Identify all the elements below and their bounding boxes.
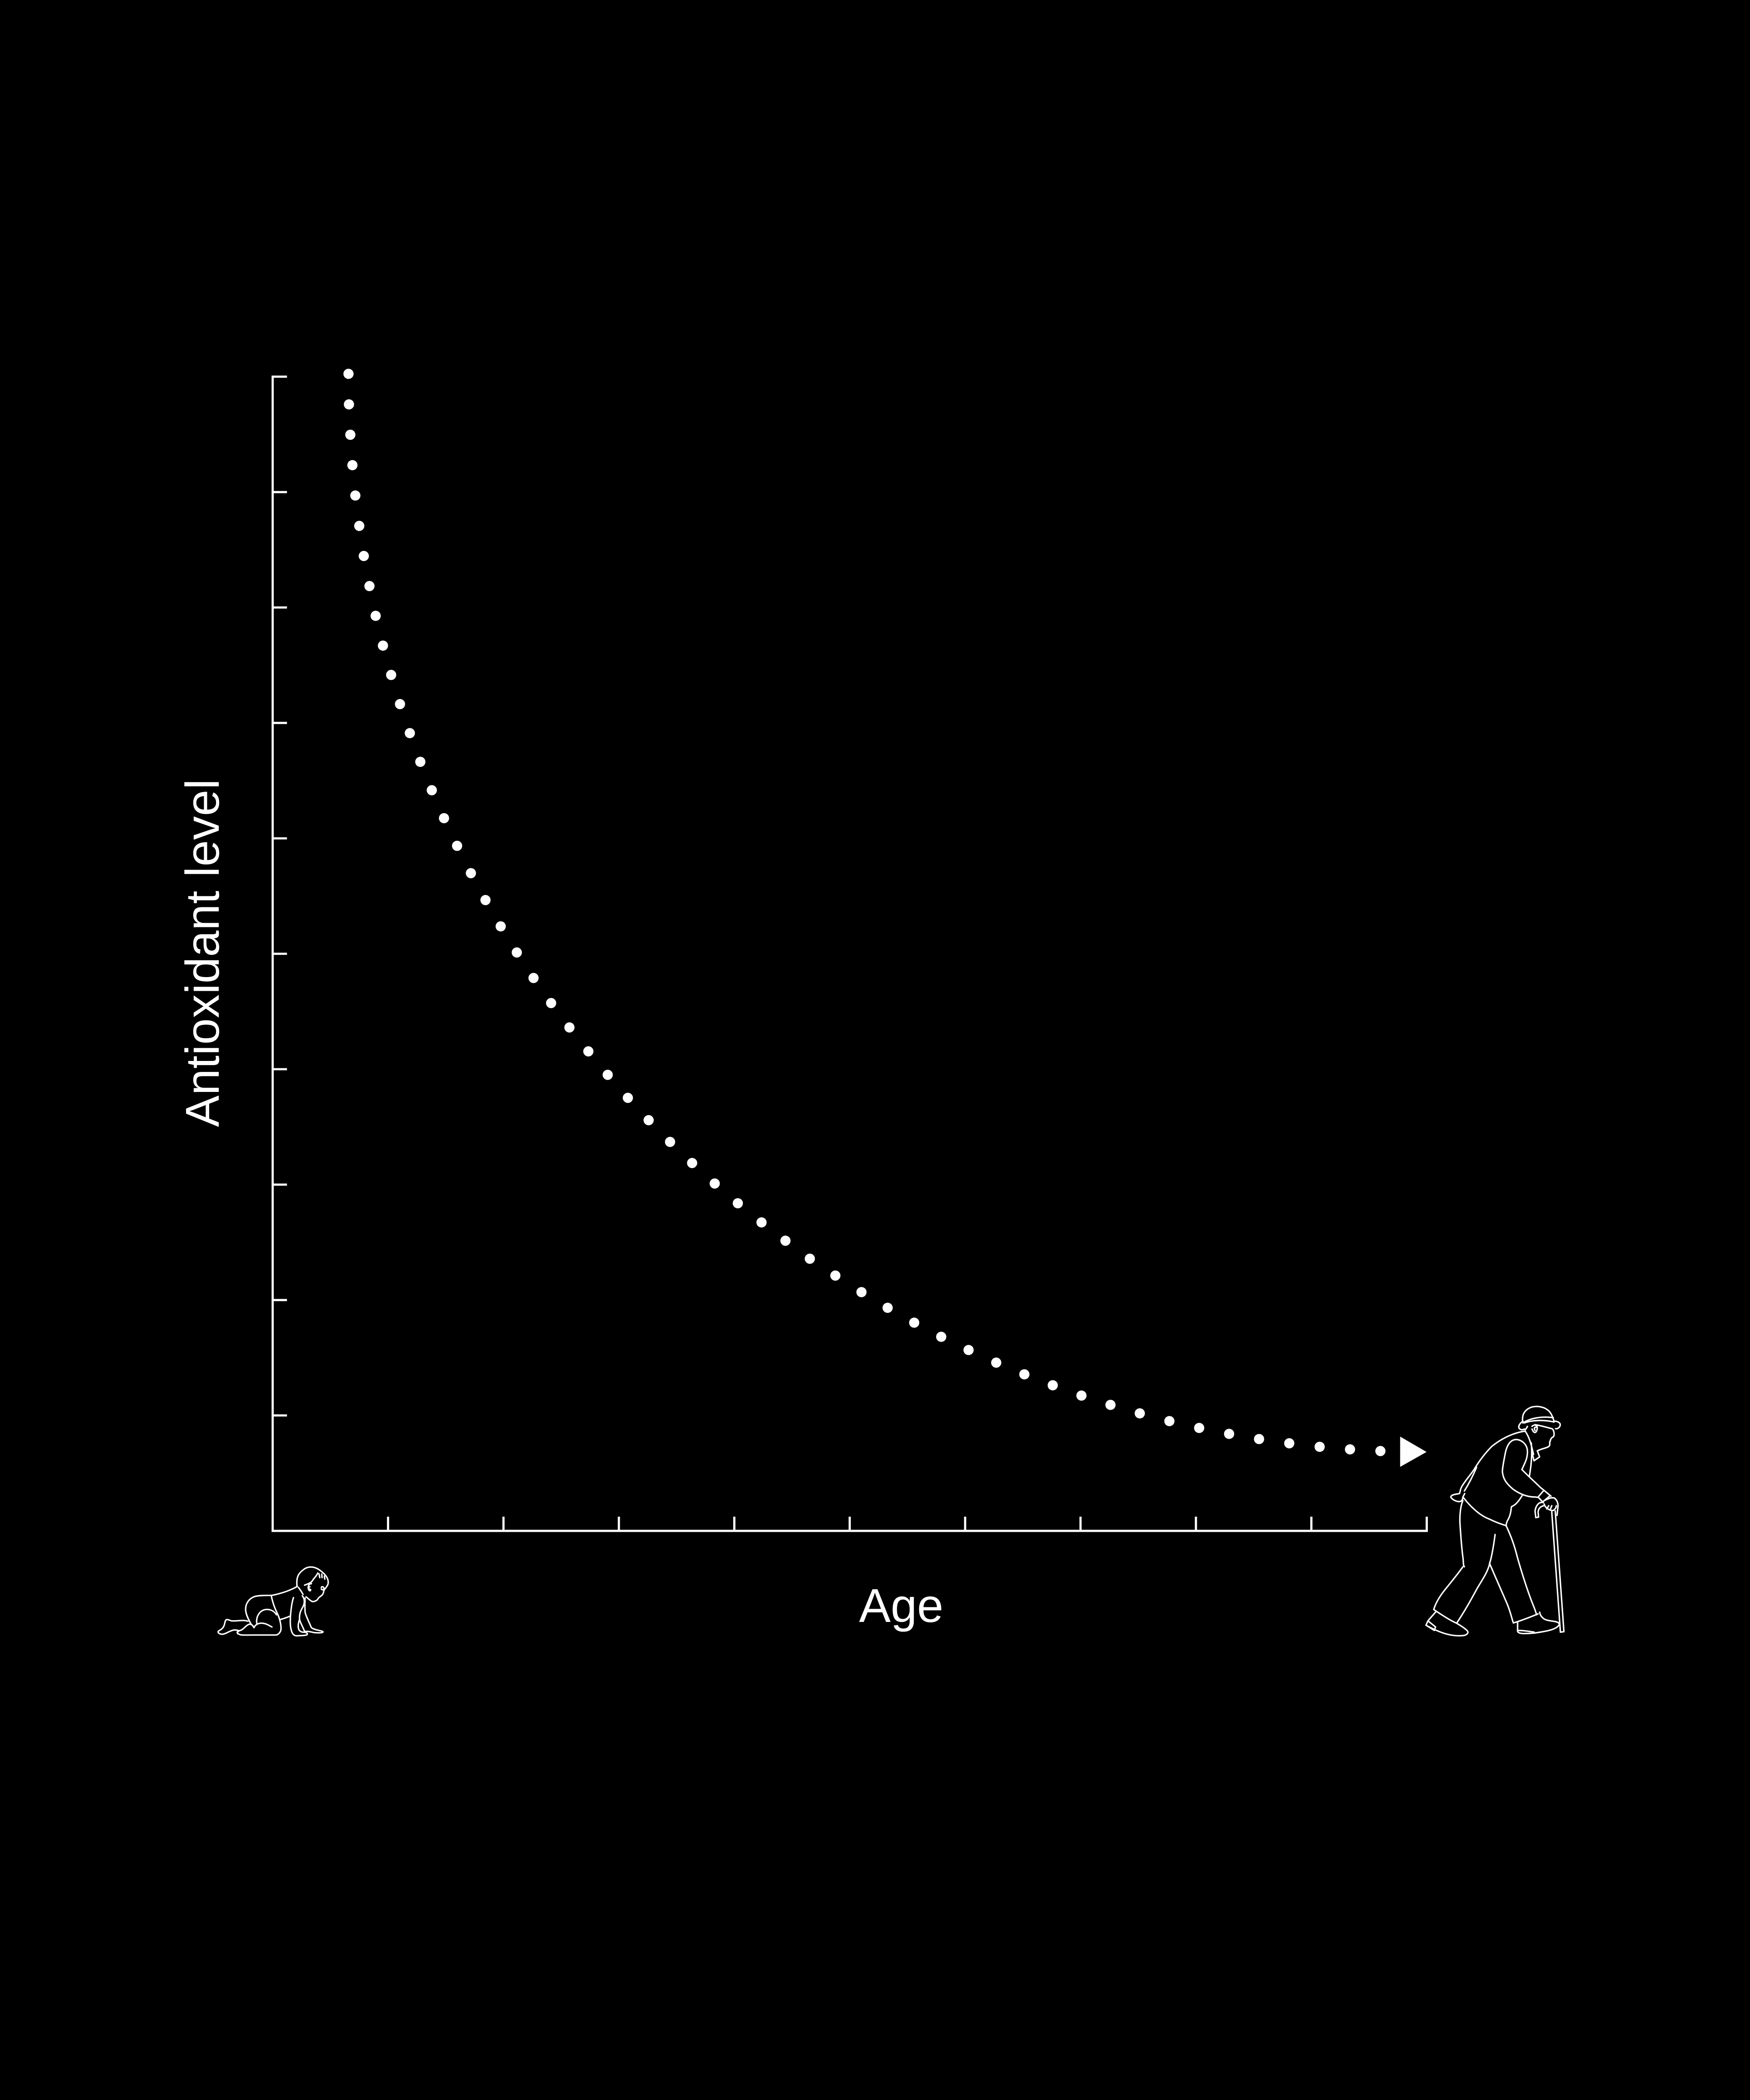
- arrowhead at curve end: [1400, 1436, 1426, 1467]
- dotted decline curve: [344, 369, 1385, 1456]
- axes with tick marks: [273, 376, 1427, 1531]
- icon: crawling baby: [218, 1567, 328, 1636]
- icon: elderly man walking with cane: [1426, 1406, 1564, 1636]
- x-axis label: Age: [859, 1580, 943, 1632]
- y-axis label: Antioxidant level: [176, 779, 229, 1127]
